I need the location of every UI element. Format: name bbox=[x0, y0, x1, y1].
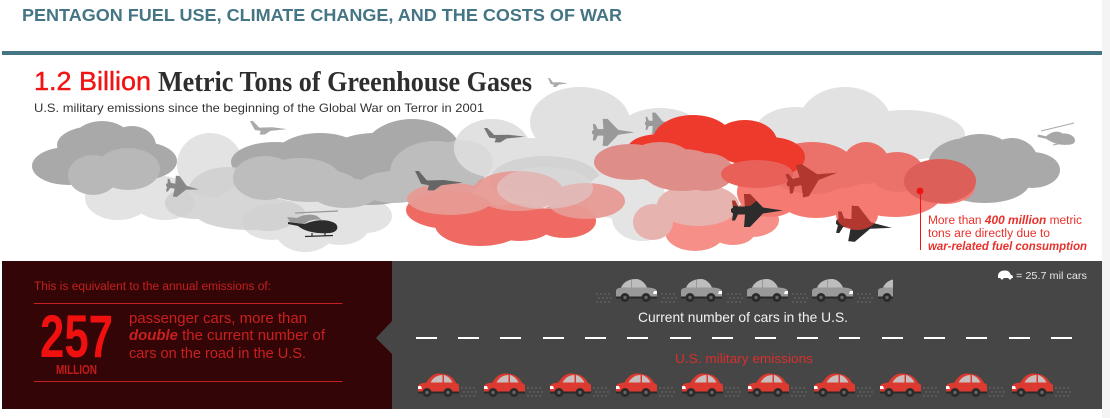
heading bbox=[34, 66, 532, 98]
grey cars row bbox=[596, 279, 919, 303]
emissions cloud illustration bbox=[32, 78, 1075, 252]
salmon cloud lower right bbox=[665, 203, 779, 251]
light cloud left bbox=[85, 133, 243, 220]
callout text bbox=[928, 215, 1087, 253]
description: double the current number of bbox=[129, 328, 326, 344]
dark cloud far right bbox=[928, 134, 1060, 203]
overlay cloud right of centre bbox=[358, 140, 493, 203]
medium cloud bbox=[165, 167, 305, 231]
description: passenger cars, more than bbox=[129, 311, 307, 327]
red cars row bbox=[418, 374, 1071, 397]
callout text: war-related fuel consumption bbox=[928, 241, 1087, 253]
intro text: This is equivalent to the annual emissions of: bbox=[34, 281, 271, 293]
jet left bbox=[165, 174, 201, 200]
callout marker bbox=[917, 188, 923, 250]
jet upper centre bbox=[484, 128, 525, 142]
jets behind red cloud bbox=[592, 113, 674, 146]
lower salmon cloud right bbox=[737, 167, 975, 230]
jet red overlap bbox=[837, 206, 874, 230]
jet dark wing overlap bbox=[732, 194, 756, 206]
current cars label: Current number of cars in the U.S. bbox=[638, 309, 848, 325]
million label: MILLION bbox=[56, 362, 97, 377]
callout text: More than 400 million metric bbox=[928, 215, 1082, 227]
light cloud behind lower pink bbox=[585, 170, 672, 241]
dark cloud centre bbox=[231, 119, 485, 205]
subheading: U.S. military emissions since the beginning of the Global War on Terror in 2001 bbox=[34, 101, 484, 115]
big number: 257 bbox=[40, 303, 113, 370]
jet centre bbox=[415, 171, 463, 190]
light grey cloud right bbox=[755, 87, 965, 163]
overlay cloud centre bbox=[233, 156, 378, 208]
overlay cloud left bbox=[68, 148, 160, 195]
jet red rotated bbox=[783, 157, 841, 200]
page title: PENTAGON FUEL USE, CLIMATE CHANGE, AND THE COSTS OF WAR bbox=[22, 5, 622, 25]
description bbox=[129, 311, 326, 362]
military emissions label: U.S. military emissions bbox=[675, 351, 814, 366]
helicopter right bbox=[1038, 123, 1075, 145]
jet upper left bbox=[250, 121, 287, 134]
dusty pink cloud upper bbox=[594, 142, 734, 191]
panel: car equivalence bbox=[2, 261, 392, 409]
heading: 1.2 Billion bbox=[34, 66, 151, 96]
heading: Metric Tons of Greenhouse Gases bbox=[158, 67, 532, 98]
red cloud low bbox=[406, 191, 596, 246]
jet dark lower right bbox=[834, 204, 894, 246]
bright red cloud bbox=[628, 115, 805, 177]
oval accent bbox=[721, 160, 793, 188]
callout text: tons are directly due to bbox=[928, 228, 1050, 240]
jet small top bbox=[548, 78, 568, 87]
light translucent cloud centre bbox=[454, 87, 702, 215]
jet dark lower middle bbox=[731, 194, 783, 227]
salmon cloud upper right bbox=[768, 142, 924, 194]
legend: = 25.7 mil cars bbox=[1016, 270, 1087, 282]
grey haze centre bbox=[490, 156, 600, 204]
pink overlay low bbox=[407, 171, 625, 219]
dark pink overlap oval bbox=[904, 159, 976, 203]
helicopter dark bbox=[287, 211, 338, 236]
description: cars on the road in the U.S. bbox=[129, 346, 306, 362]
dusty pink overlay lower bbox=[633, 184, 739, 240]
dark cloud left bbox=[32, 121, 177, 185]
lane dashes bbox=[416, 337, 1072, 339]
light cloud lower middle bbox=[242, 198, 392, 252]
header rule bbox=[2, 51, 1102, 55]
pale overlay on low cloud bbox=[497, 167, 593, 209]
panel: road bbox=[376, 261, 1102, 409]
